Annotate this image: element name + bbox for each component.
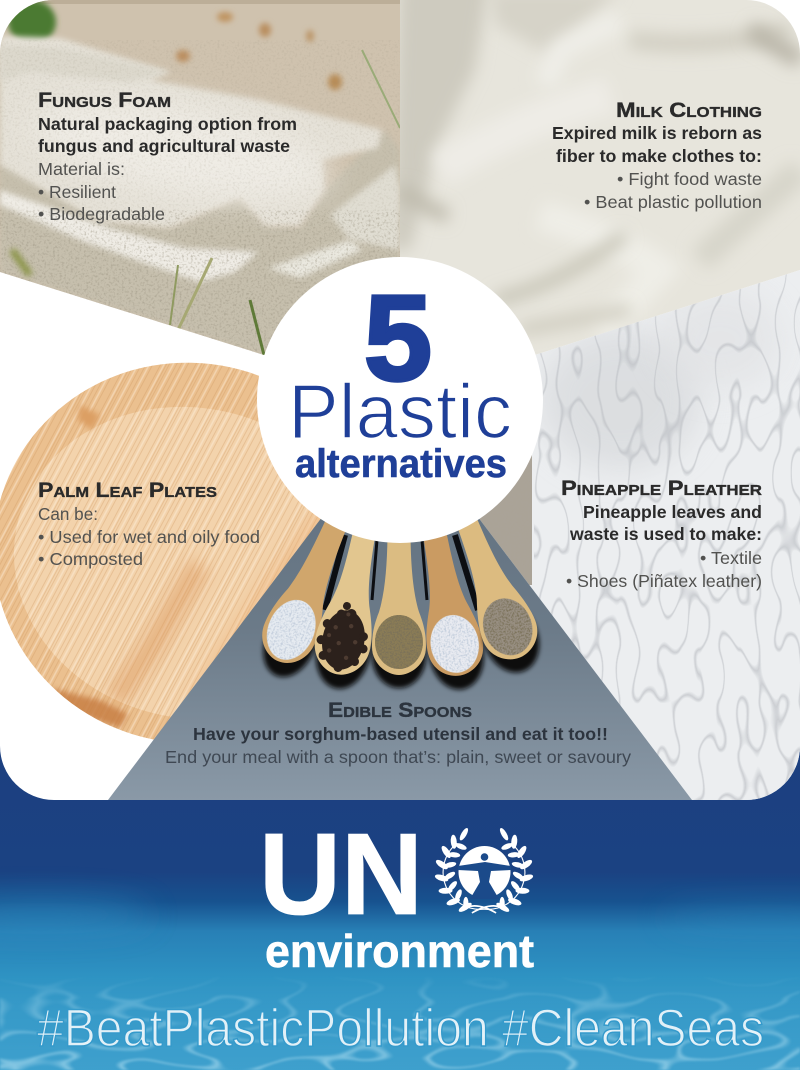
- spoon 5: [458, 520, 542, 676]
- UN logotype: UN: [259, 809, 423, 939]
- text: milk clothing: Milk Clothing: [616, 99, 762, 122]
- text: fungus foam: [38, 89, 297, 224]
- center badge: 5 Plastic alternatives: [257, 257, 543, 543]
- text: pineapple pleather: Pineapple Pleather: [561, 477, 762, 500]
- text: edible spoons: Have your sorghum-based utensil and eat it too!!: [193, 724, 608, 744]
- grey triangle background: [108, 519, 692, 800]
- panel: edible spoons: [108, 519, 692, 800]
- text: edible spoons: Edible Spoons: [328, 699, 472, 722]
- text: pineapple pleather: waste is used to make:: [569, 524, 762, 544]
- text: edible spoons: [165, 699, 631, 767]
- environment wordmark: environment: [265, 925, 534, 977]
- palm leaf plate: [0, 362, 320, 740]
- text: milk clothing: • Beat plastic pollution: [584, 192, 762, 212]
- spoon 3: [372, 537, 426, 688]
- fungus foam photo: [0, 0, 400, 360]
- text: edible spoons: End your meal with a spoon that’s: plain, sweet or savoury: [165, 747, 631, 767]
- text: fungus foam: Fungus Foam: [38, 89, 171, 112]
- panel: milk clothing: [390, 0, 800, 360]
- text: milk clothing: fiber to make clothes to:: [556, 146, 762, 166]
- grey leather sliver: [480, 455, 532, 585]
- panel: fungus foam: [0, 0, 400, 360]
- text: pineapple pleather: [561, 477, 762, 591]
- peppercorns: [316, 602, 368, 672]
- pineapple leather texture: [534, 270, 800, 800]
- spoon 4: [424, 535, 487, 693]
- center badge: 5 Plastic alternatives: Plastic: [288, 369, 512, 455]
- text: palm leaf plates: [38, 479, 260, 569]
- spoon 1: [260, 522, 345, 680]
- text: fungus foam: • Biodegradable: [38, 204, 165, 224]
- spoon 2: [312, 534, 374, 692]
- text: pineapple pleather: Pineapple leaves and: [583, 502, 762, 522]
- panel: pineapple pleather: [480, 270, 800, 800]
- text: milk clothing: Expired milk is reborn as: [552, 123, 762, 143]
- text: fungus foam: • Resilient: [38, 182, 116, 202]
- text: fungus foam: fungus and agricultural waste: [38, 136, 290, 156]
- text: milk clothing: • Fight food waste: [617, 169, 762, 189]
- text: milk clothing: [552, 99, 762, 212]
- text: fungus foam: Natural packaging option from: [38, 114, 297, 134]
- text: palm leaf plates: • Composted: [38, 549, 143, 569]
- spoons photo: [260, 520, 542, 693]
- text: pineapple pleather: • Shoes (Piñatex leather): [566, 571, 762, 591]
- text: palm leaf plates: • Used for wet and oily food: [38, 527, 260, 547]
- image card: [0, 0, 800, 800]
- text: palm leaf plates: Can be:: [38, 504, 98, 524]
- icon: UN emblem: [434, 827, 534, 914]
- milk clothing fabric: [390, 0, 800, 335]
- center badge: 5 Plastic alternatives: 5: [364, 270, 432, 406]
- text: palm leaf plates: Palm Leaf Plates: [38, 479, 217, 502]
- text: fungus foam: Material is:: [38, 159, 125, 179]
- ocean banner: [0, 740, 800, 1070]
- text: pineapple pleather: • Textile: [700, 548, 762, 568]
- panel: palm leaf plates: [0, 362, 320, 740]
- center badge: 5 Plastic alternatives: alternatives: [295, 442, 507, 486]
